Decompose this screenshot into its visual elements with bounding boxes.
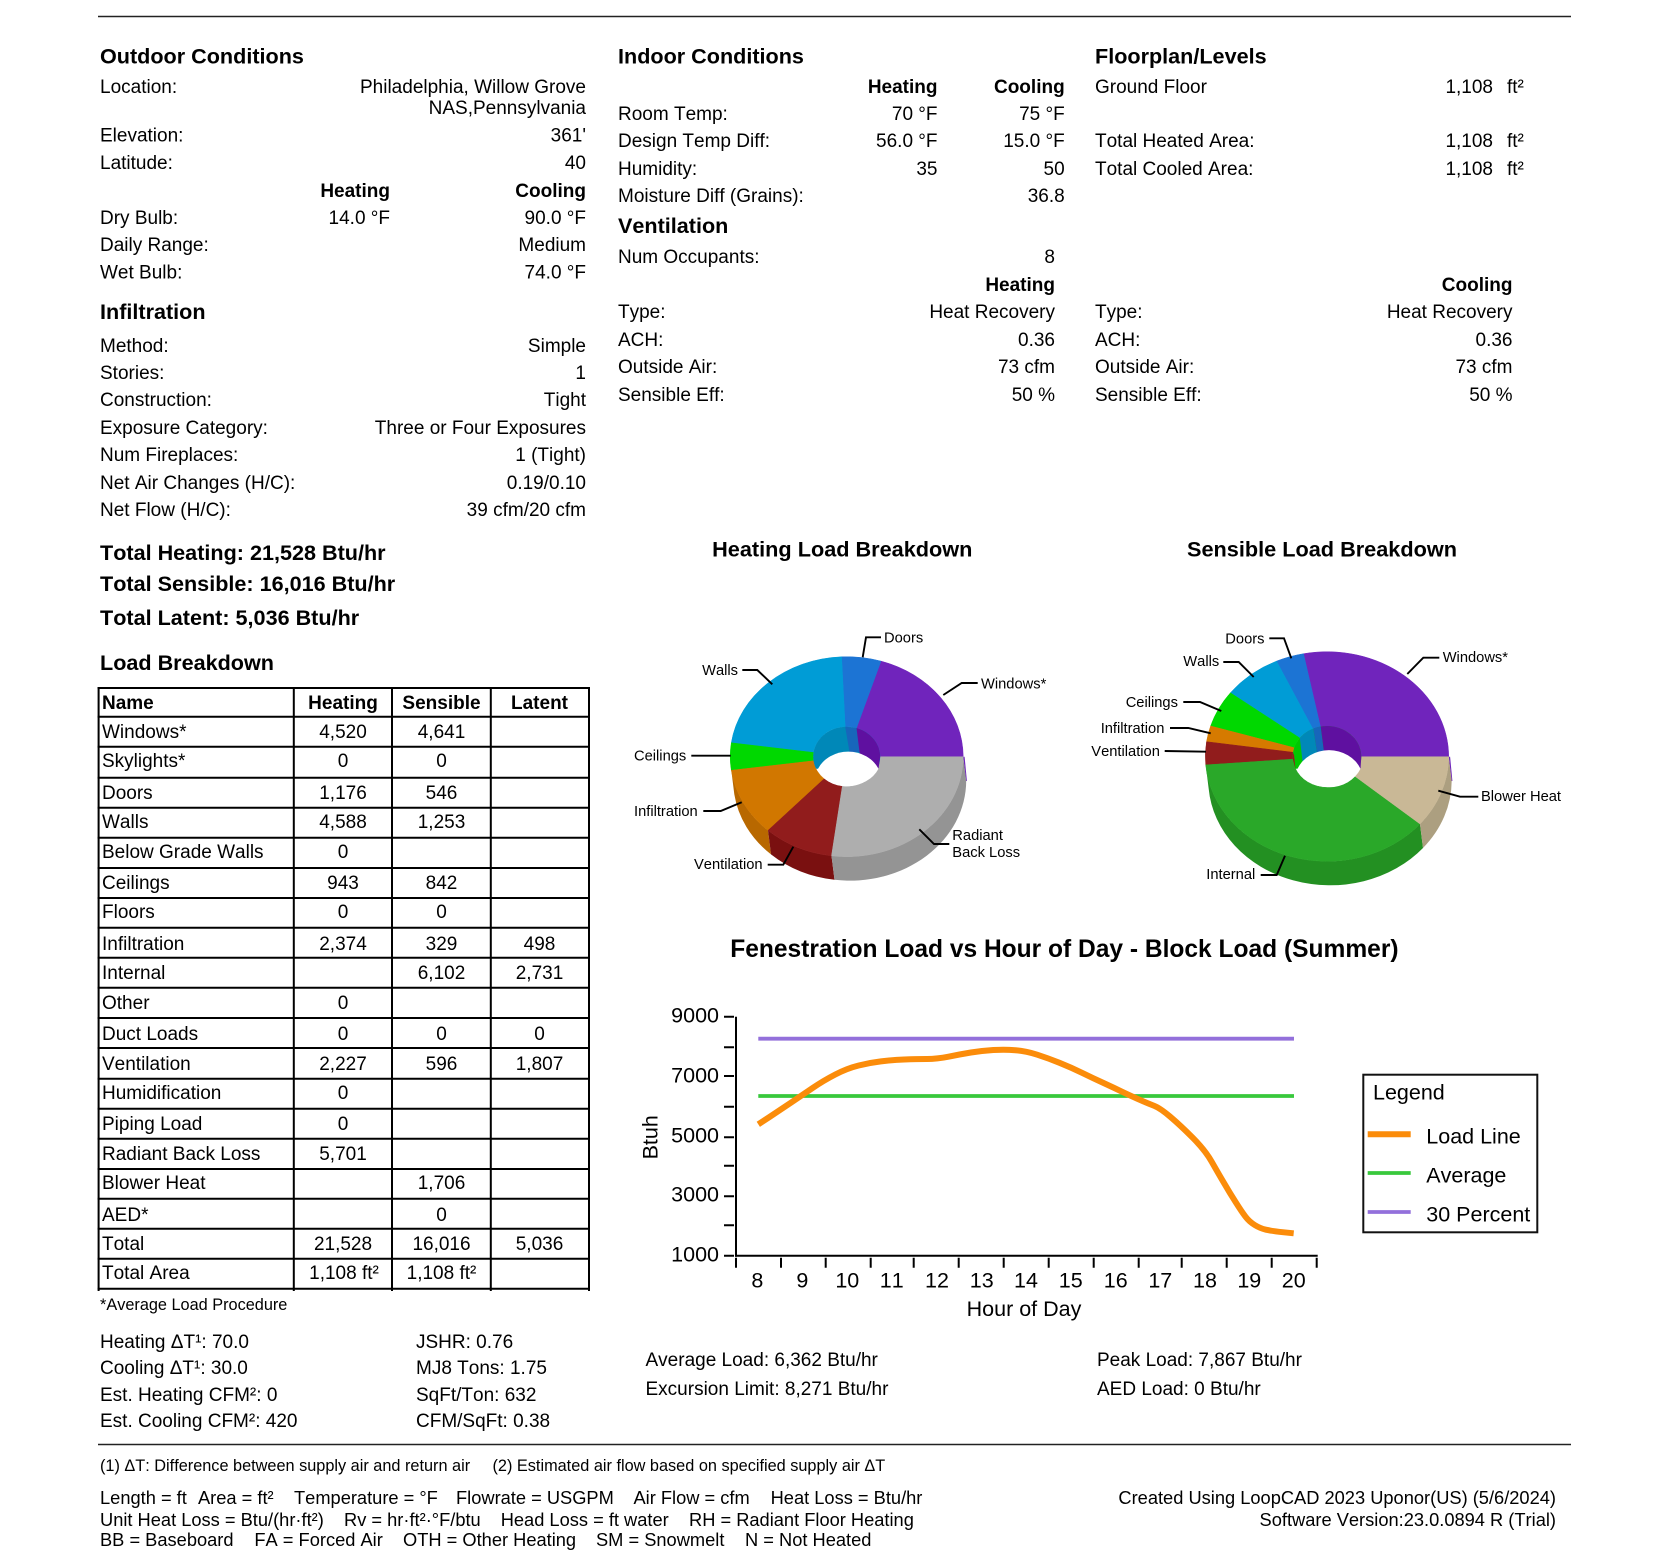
- delta T footnotes: (1) ΔT: Difference between supply air and return air: [100, 1457, 471, 1475]
- heading: floorplan levels: Floorplan/Levels: [1095, 43, 1267, 68]
- heading: outdoor conditions: Outdoor Conditions: [100, 43, 304, 68]
- ground floor row: Ground Floor: [1095, 77, 1208, 98]
- legend item: average: Average: [1426, 1164, 1506, 1188]
- table body rows: AED*: [102, 1205, 149, 1226]
- panel: ventilation: [618, 213, 1513, 406]
- cooling ventilation values: Cooling: [1442, 275, 1512, 296]
- humidity row: 50: [1044, 159, 1065, 180]
- total cooled area row: [1095, 159, 1524, 180]
- method row: [100, 336, 586, 357]
- unit legend row 1: Area = ft²: [198, 1487, 274, 1508]
- callout: walls: [702, 663, 772, 684]
- ground floor row: [1095, 77, 1524, 98]
- legend: Legend: [1373, 1080, 1445, 1104]
- callout: radiant back loss: Back Loss: [952, 845, 1020, 861]
- column headers: Heating: [320, 181, 390, 202]
- chart: sensible load breakdown pie: [1091, 536, 1561, 885]
- software credit: Software Version:23.0.0894 R (Trial): [1260, 1509, 1556, 1530]
- table body rows: 943: [327, 873, 359, 894]
- callout: infiltration: [1101, 721, 1211, 737]
- x axis labels: [751, 1268, 1306, 1292]
- line: 30 percent: [758, 1037, 1294, 1041]
- callout: ceilings: [1126, 695, 1221, 711]
- ground floor row: ft²: [1507, 77, 1524, 98]
- dry bulb row: [100, 208, 586, 229]
- room temp row: Room Temp:: [618, 104, 728, 125]
- heating ventilation values: Outside Air:: [618, 357, 717, 378]
- moisture diff row: Moisture Diff (Grains):: [618, 186, 804, 207]
- total heated area row: 1,108: [1445, 131, 1493, 152]
- callout: blower heat: [1438, 789, 1561, 805]
- sizing metrics column: MJ8 Tons: 1.75: [416, 1358, 547, 1379]
- table body rows: 16,016: [412, 1234, 471, 1255]
- table body rows: Windows*: [102, 722, 187, 743]
- y axis labels: [671, 1004, 719, 1267]
- x axis labels: 16: [1104, 1268, 1128, 1292]
- pie top wedges: [730, 657, 963, 857]
- table body rows: 0: [338, 902, 348, 923]
- table body rows: Internal: [102, 963, 165, 984]
- cooling ventilation values: 50 %: [1469, 385, 1513, 406]
- table body rows: 0: [534, 1024, 545, 1045]
- x axis labels: 14: [1014, 1268, 1038, 1292]
- table body rows: 596: [426, 1054, 457, 1075]
- table: load breakdown: [98, 687, 590, 1291]
- callout: doors: [1225, 631, 1291, 658]
- table body rows: [102, 722, 563, 1284]
- aed load: AED Load: 0 Btu/hr: [1097, 1379, 1261, 1400]
- heating ventilation values: Type:: [618, 302, 666, 323]
- x axis with ticks: [735, 1256, 1318, 1268]
- column headers: [320, 181, 586, 202]
- heating ventilation values: Heating: [985, 275, 1055, 296]
- total cooled area row: ft²: [1507, 159, 1524, 180]
- table body rows: 1,108 ft²: [407, 1263, 476, 1284]
- legend item: load line: Load Line: [1426, 1124, 1521, 1148]
- table body rows: Floors: [102, 902, 155, 923]
- x axis labels: 9: [796, 1268, 808, 1292]
- unit legend row 2: Rv = hr·ft²·°F/btu: [344, 1509, 481, 1530]
- panel: summary metrics: [100, 1332, 550, 1432]
- unit legend row 2: Unit Heat Loss = Btu/(hr·ft²): [100, 1509, 324, 1530]
- fireplaces row: [100, 445, 586, 466]
- pie side walls: [731, 757, 967, 881]
- table header row: Latent: [511, 693, 569, 714]
- column headers: Cooling: [994, 77, 1065, 98]
- table body rows: 1,253: [418, 812, 465, 833]
- table body rows: Blower Heat: [102, 1173, 206, 1194]
- table body rows: Walls: [102, 812, 148, 833]
- table body rows: Doors: [102, 783, 153, 804]
- net flow row: Net Flow (H/C):: [100, 500, 231, 521]
- fireplaces row: Num Fireplaces:: [100, 445, 238, 466]
- table header row: [102, 693, 569, 714]
- exposure row: Exposure Category:: [100, 418, 268, 439]
- total sensible: Total Sensible: 16,016 Btu/hr: [100, 571, 396, 596]
- x axis labels: 19: [1237, 1268, 1261, 1292]
- excursion limit: Excursion Limit: 8,271 Btu/hr: [646, 1379, 889, 1400]
- heating ventilation values: 0.36: [1018, 330, 1055, 351]
- x axis labels: 17: [1148, 1268, 1172, 1292]
- chart title: sensible: Sensible Load Breakdown: [1187, 536, 1457, 562]
- callout: doors: Doors: [884, 630, 923, 646]
- daily range row: Medium: [518, 235, 586, 256]
- moisture diff row: [618, 186, 1065, 207]
- table header row: Heating: [308, 693, 378, 714]
- cooling ventilation values: Outside Air:: [1095, 357, 1194, 378]
- sizing metrics column: CFM/SqFt: 0.38: [416, 1411, 550, 1432]
- y axis labels: 5000: [671, 1124, 719, 1148]
- stories row: 1: [575, 363, 586, 384]
- airflow metrics column: Heating ΔT¹: 70.0: [100, 1332, 249, 1353]
- table body rows: 0: [338, 1083, 348, 1104]
- heating ventilation values: 50 %: [1012, 385, 1055, 406]
- pie inner wall: [1293, 726, 1361, 787]
- table body rows: Piping Load: [102, 1114, 202, 1135]
- footnote: average load procedure: *Average Load Procedure: [100, 1296, 287, 1314]
- elevation row: [100, 126, 586, 146]
- callout: internal: [1206, 856, 1285, 883]
- callout: walls: [1183, 654, 1254, 677]
- method row: Simple: [528, 336, 586, 357]
- total cooled area row: Total Cooled Area:: [1095, 159, 1253, 180]
- location row: [100, 77, 586, 119]
- table body rows: 6,102: [418, 963, 465, 984]
- daily range row: [100, 235, 586, 256]
- unit legend row 3: N = Not Heated: [745, 1529, 871, 1550]
- total heated area row: [1095, 131, 1524, 152]
- construction row: Construction:: [100, 390, 212, 411]
- callout: ceilings: Ceilings: [634, 749, 686, 765]
- callout: ventilation: Ventilation: [694, 857, 763, 873]
- unit legend row 2: Head Loss = ft water: [501, 1509, 669, 1530]
- callout: ceilings: Ceilings: [1126, 695, 1178, 711]
- table body rows: Total Area: [102, 1263, 190, 1284]
- footer notes: [100, 1457, 1556, 1550]
- exposure row: Three or Four Exposures: [375, 418, 586, 439]
- table body rows: 0: [338, 1114, 348, 1135]
- x axis labels: 10: [835, 1268, 859, 1292]
- table body rows: 1,108 ft²: [309, 1263, 379, 1284]
- callout: ventilation: [1091, 744, 1206, 760]
- table body rows: 329: [426, 934, 457, 955]
- heating ventilation values: 73 cfm: [998, 357, 1055, 378]
- unit legend row 3: SM = Snowmelt: [596, 1529, 724, 1550]
- y axis title: Btuh: [638, 1115, 662, 1159]
- legend: [1363, 1075, 1537, 1232]
- software credit: [1118, 1487, 1556, 1530]
- table body rows: Infiltration: [102, 934, 184, 955]
- humidity row: Humidity:: [618, 159, 697, 180]
- column headers: Cooling: [515, 181, 586, 202]
- callout: ceilings: [634, 749, 731, 765]
- table body rows: 546: [426, 783, 457, 804]
- net flow row: [100, 500, 586, 521]
- humidity row: [618, 159, 1065, 180]
- unit legend row 1: Air Flow = cfm: [634, 1487, 750, 1508]
- x axis labels: 20: [1282, 1268, 1306, 1292]
- table body rows: Other: [102, 993, 150, 1014]
- unit legend row 3: [100, 1529, 871, 1550]
- table body rows: 842: [426, 873, 457, 894]
- table body rows: 2,227: [319, 1054, 367, 1075]
- design temp diff row: [618, 131, 1065, 152]
- unit legend row 3: BB = Baseboard: [100, 1529, 234, 1550]
- callout: radiant back loss: Radiant: [952, 828, 1003, 844]
- airflow metrics column: Cooling ΔT¹: 30.0: [100, 1358, 248, 1379]
- table body rows: 5,701: [319, 1144, 367, 1165]
- panel: load statistics: [646, 1350, 1303, 1400]
- humidity row: 35: [916, 159, 938, 180]
- callout: walls: Walls: [702, 663, 738, 679]
- callout: radiant back loss: [919, 828, 1020, 861]
- heading: ventilation: Ventilation: [618, 213, 728, 238]
- airflow metrics column: Est. Cooling CFM²: 420: [100, 1411, 297, 1432]
- callout: blower heat: Blower Heat: [1481, 789, 1561, 805]
- sizing metrics column: SqFt/Ton: 632: [416, 1385, 536, 1406]
- pie inner wall: [813, 727, 880, 786]
- heading: infiltration: Infiltration: [100, 299, 206, 324]
- wet bulb row: [100, 262, 586, 284]
- table body rows: 1,807: [516, 1054, 563, 1075]
- exposure row: [100, 418, 586, 439]
- latitude row: 40: [565, 153, 586, 174]
- sizing metrics column: JSHR: 0.76: [416, 1332, 513, 1353]
- unit legend row 1: Temperature = °F: [294, 1487, 438, 1508]
- airflow metrics column: Est. Heating CFM²: 0: [100, 1385, 277, 1406]
- panel: outdoor conditions: [100, 43, 586, 283]
- design temp diff row: 15.0 °F: [1003, 131, 1065, 152]
- x axis labels: 12: [925, 1268, 949, 1292]
- table body rows: 0: [436, 1024, 447, 1045]
- peak load: Peak Load: 7,867 Btu/hr: [1097, 1350, 1303, 1371]
- total heated area row: Total Heated Area:: [1095, 131, 1254, 152]
- table body rows: Duct Loads: [102, 1024, 198, 1045]
- column headers: Heating: [868, 77, 938, 98]
- table body rows: Below Grade Walls: [102, 842, 264, 863]
- table body rows: 2,374: [319, 934, 367, 955]
- delta T footnotes: (2) Estimated air flow based on specified supply air ΔT: [492, 1457, 885, 1475]
- net air changes row: [100, 473, 586, 494]
- table body rows: 0: [436, 902, 447, 923]
- table body rows: Ventilation: [102, 1054, 191, 1075]
- legend item: 30 percent: 30 Percent: [1426, 1203, 1530, 1227]
- chart title: heating: Heating Load Breakdown: [712, 536, 972, 562]
- table body rows: 0: [436, 1205, 447, 1226]
- callout: ventilation: [694, 847, 793, 873]
- total heated area row: ft²: [1507, 131, 1524, 152]
- x axis labels: 18: [1193, 1268, 1217, 1292]
- callout: internal: Internal: [1206, 867, 1255, 883]
- panel: totals: [100, 540, 396, 630]
- y axis labels: 3000: [671, 1183, 719, 1207]
- unit legend row 3: OTH = Other Heating: [403, 1529, 576, 1550]
- callout: infiltration: Infiltration: [634, 804, 698, 820]
- unit legend row 1: Flowrate = USGPM: [456, 1487, 614, 1508]
- table body rows: Humidification: [102, 1083, 221, 1104]
- unit legend row 1: Heat Loss = Btu/hr: [771, 1487, 922, 1508]
- callout: doors: Doors: [1225, 631, 1264, 647]
- total cooled area row: 1,108: [1445, 159, 1493, 180]
- unit legend row 2: RH = Radiant Floor Heating: [689, 1509, 914, 1530]
- unit legend row 3: FA = Forced Air: [254, 1529, 383, 1550]
- table body rows: 4,520: [319, 722, 367, 743]
- x axis labels: 8: [751, 1268, 763, 1292]
- table body rows: 4,588: [319, 812, 367, 833]
- location row: Philadelphia, Willow Grove: [360, 77, 586, 98]
- design temp diff row: 56.0 °F: [876, 131, 938, 152]
- location row: NAS,Pennsylvania: [429, 98, 586, 119]
- table body rows: 0: [338, 1024, 348, 1045]
- table body rows: 5,036: [516, 1234, 563, 1255]
- column headers: [868, 77, 1065, 98]
- table body rows: 2,731: [516, 963, 563, 984]
- heading: indoor conditions: Indoor Conditions: [618, 43, 804, 68]
- table body rows: 21,528: [314, 1234, 372, 1255]
- elevation row: Elevation:: [100, 126, 183, 146]
- unit legend row 1: Length = ft: [100, 1487, 187, 1508]
- table body rows: Ceilings: [102, 873, 170, 894]
- table body rows: 0: [338, 993, 348, 1014]
- dry bulb row: 14.0 °F: [329, 208, 390, 229]
- x axis labels: 13: [970, 1268, 994, 1292]
- room temp row: 70 °F: [892, 104, 938, 125]
- latitude row: [100, 153, 586, 174]
- table header row: Name: [102, 693, 154, 714]
- callout: walls: Walls: [1183, 654, 1219, 670]
- cooling ventilation values: Heat Recovery: [1387, 302, 1513, 323]
- heating ventilation values: ACH:: [618, 330, 663, 351]
- design temp diff row: Design Temp Diff:: [618, 131, 770, 152]
- y axis labels: 7000: [671, 1063, 719, 1087]
- line: load line: [758, 1050, 1294, 1233]
- cooling ventilation values: Type:: [1095, 302, 1143, 323]
- callout: windows: Windows*: [1443, 650, 1508, 666]
- chart: fenestration load line chart: [638, 936, 1537, 1321]
- table header row: Sensible: [402, 693, 481, 714]
- room temp row: 75 °F: [1019, 104, 1065, 125]
- stories row: [100, 363, 586, 384]
- occupants row: [618, 247, 1055, 268]
- method row: Method:: [100, 336, 169, 357]
- line: average: [758, 1094, 1294, 1098]
- wet bulb row: Wet Bulb:: [100, 262, 182, 284]
- heading: load breakdown: Load Breakdown: [100, 650, 274, 675]
- table body rows: Skylights*: [102, 751, 186, 772]
- table body rows: 1,706: [418, 1173, 465, 1194]
- sizing metrics column: [416, 1332, 550, 1432]
- callout: windows: [1407, 650, 1508, 674]
- table body rows: 4,641: [418, 722, 465, 743]
- table body rows: 0: [338, 842, 348, 863]
- construction row: [100, 390, 587, 411]
- cooling ventilation values: ACH:: [1095, 330, 1140, 351]
- net air changes row: 0.19/0.10: [507, 473, 586, 494]
- cooling ventilation values: Sensible Eff:: [1095, 385, 1202, 406]
- table body rows: 0: [338, 751, 348, 772]
- wet bulb row: 74.0 °F: [525, 262, 586, 284]
- callout: windows: Windows*: [981, 676, 1047, 692]
- callout: infiltration: Infiltration: [1101, 721, 1164, 737]
- net air changes row: Net Air Changes (H/C):: [100, 473, 295, 494]
- heating ventilation values: Sensible Eff:: [618, 385, 725, 406]
- construction row: Tight: [544, 390, 587, 411]
- y axis labels: 9000: [671, 1004, 719, 1028]
- y axis with ticks: [724, 1017, 736, 1257]
- occupants row: 8: [1044, 247, 1055, 268]
- heating ventilation values: [618, 275, 1055, 406]
- table body rows: Radiant Back Loss: [102, 1144, 260, 1165]
- location row: Location:: [100, 77, 177, 98]
- unit legend row 1: [100, 1487, 922, 1508]
- unit legend row 2: [100, 1509, 914, 1530]
- table body rows: Total: [102, 1234, 144, 1255]
- latitude row: Latitude:: [100, 153, 173, 174]
- net flow row: 39 cfm/20 cfm: [467, 500, 586, 521]
- pie top wedges: [1205, 652, 1449, 861]
- occupants row: Num Occupants:: [618, 247, 760, 268]
- table body rows: 498: [524, 934, 555, 955]
- y axis labels: 1000: [671, 1243, 719, 1267]
- dry bulb row: Dry Bulb:: [100, 208, 178, 229]
- panel: infiltration: [100, 299, 587, 521]
- cooling ventilation values: 73 cfm: [1455, 357, 1512, 378]
- x axis labels: 15: [1059, 1268, 1083, 1292]
- panel: floorplan levels: [1095, 43, 1524, 180]
- pie side walls: [1206, 757, 1452, 885]
- room temp row: [618, 104, 1065, 125]
- table body rows: 0: [436, 751, 447, 772]
- callout: ventilation: Ventilation: [1091, 744, 1160, 760]
- heating ventilation values: Heat Recovery: [929, 302, 1055, 323]
- dry bulb row: 90.0 °F: [525, 208, 586, 229]
- callout: doors: [863, 630, 923, 657]
- moisture diff row: 36.8: [1028, 186, 1065, 207]
- total heating: Total Heating: 21,528 Btu/hr: [100, 540, 386, 565]
- airflow metrics column: [100, 1332, 297, 1432]
- chart: heating load breakdown pie: [634, 536, 1047, 881]
- x axis labels: 11: [880, 1268, 904, 1292]
- average load: Average Load: 6,362 Btu/hr: [646, 1350, 879, 1371]
- legend item: average: [1368, 1164, 1506, 1188]
- fireplaces row: 1 (Tight): [515, 445, 586, 466]
- total latent: Total Latent: 5,036 Btu/hr: [100, 605, 360, 630]
- callout: windows: [943, 676, 1047, 695]
- x axis title: Hour of Day: [967, 1297, 1082, 1321]
- delta T footnotes: [100, 1457, 885, 1475]
- panel: indoor conditions: [618, 43, 1065, 207]
- daily range row: Daily Range:: [100, 235, 209, 256]
- elevation row: 361': [551, 126, 586, 146]
- table body rows: 1,176: [319, 783, 367, 804]
- callout: infiltration: [634, 802, 742, 820]
- stories row: Stories:: [100, 363, 164, 384]
- ground floor row: 1,108: [1445, 77, 1493, 98]
- cooling ventilation values: 0.36: [1476, 330, 1512, 351]
- software credit: Created Using LoopCAD 2023 Uponor(US) (5/6/2024): [1118, 1487, 1556, 1508]
- chart title: fenestration: Fenestration Load vs Hour of Day - Block Load (Summer): [730, 936, 1399, 963]
- cooling ventilation values: [1095, 275, 1513, 406]
